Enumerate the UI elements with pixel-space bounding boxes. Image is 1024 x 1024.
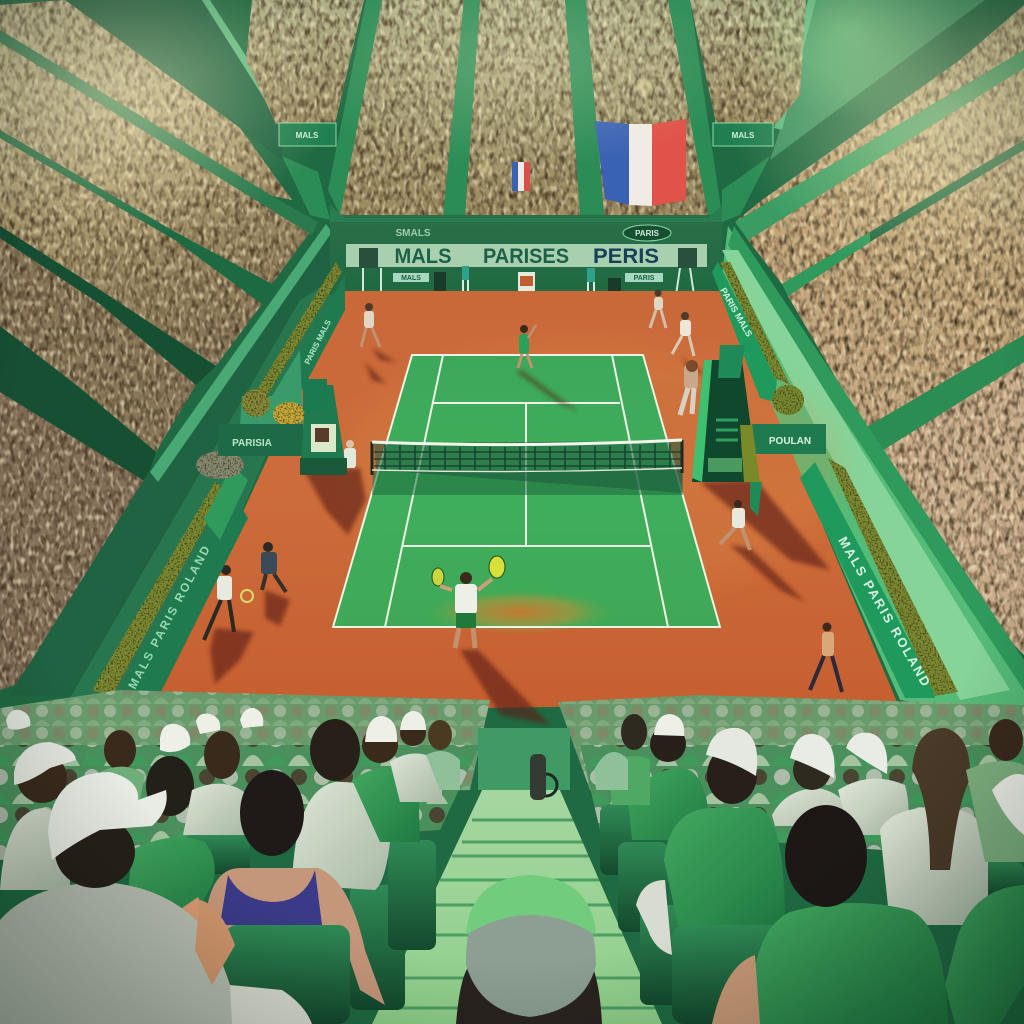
flag: small French flag — [512, 162, 530, 191]
left hedge planters and sign: PARISIA — [232, 438, 272, 449]
right advert boards with hedges: PARIS MALS — [718, 286, 754, 338]
left perimeter wall — [10, 224, 345, 700]
crowd: top, left and right stands — [0, 0, 1024, 690]
back wall banner: PERIS — [593, 245, 659, 268]
back wall banner — [346, 244, 707, 268]
back wall: SMALS — [396, 228, 431, 239]
tennis net — [372, 440, 683, 495]
back wall — [330, 205, 722, 295]
right perimeter wall — [720, 226, 1024, 720]
bottom mid crowd: right block — [558, 695, 1024, 860]
back wall seats and staff — [359, 248, 697, 304]
back wall: PARIS — [634, 275, 655, 282]
left advert boards with hedges: MALS PARIS ROLAND — [125, 543, 213, 691]
bottom mid crowd: left block — [0, 690, 490, 860]
spectators: left side — [0, 708, 460, 1024]
flag: large French flag — [595, 119, 686, 206]
clay court surface — [155, 291, 897, 708]
right advert boards with hedges — [712, 262, 958, 698]
small team signs: MALS — [296, 131, 319, 140]
player: near baseline — [432, 556, 505, 648]
back wall: PARIS — [635, 229, 660, 238]
foreground spectator in green cap — [456, 875, 602, 1024]
small team signs: MALS — [732, 131, 755, 140]
back wall banner: PARISES — [483, 245, 569, 268]
left umpire chair — [300, 379, 347, 475]
playing court — [333, 355, 720, 634]
left hedge planters and sign — [218, 350, 305, 456]
tier dividers — [0, 30, 1024, 482]
aisle stairs in top stands — [282, 0, 770, 222]
stands: upper structure — [60, 0, 985, 232]
left advert boards with hedges: PARIS MALS — [303, 318, 333, 366]
player: far baseline — [518, 325, 536, 368]
right advert boards with hedges: MALS PARIS ROLAND — [835, 534, 933, 689]
central aisle stairs — [345, 728, 690, 1024]
left advert boards with hedges — [92, 262, 345, 698]
shadows on clay and court — [210, 348, 830, 725]
line judges and ball kids — [204, 290, 842, 692]
back wall banner: MALS — [394, 245, 452, 268]
small team signs — [279, 123, 773, 146]
back wall: MALS — [401, 275, 421, 282]
foreground seats — [185, 805, 1024, 1024]
right advert boards with hedges: POULAN — [769, 436, 811, 447]
spectators: right side — [594, 714, 1024, 1024]
right umpire chair — [692, 345, 762, 516]
lighting: sun glow — [0, 0, 1024, 280]
